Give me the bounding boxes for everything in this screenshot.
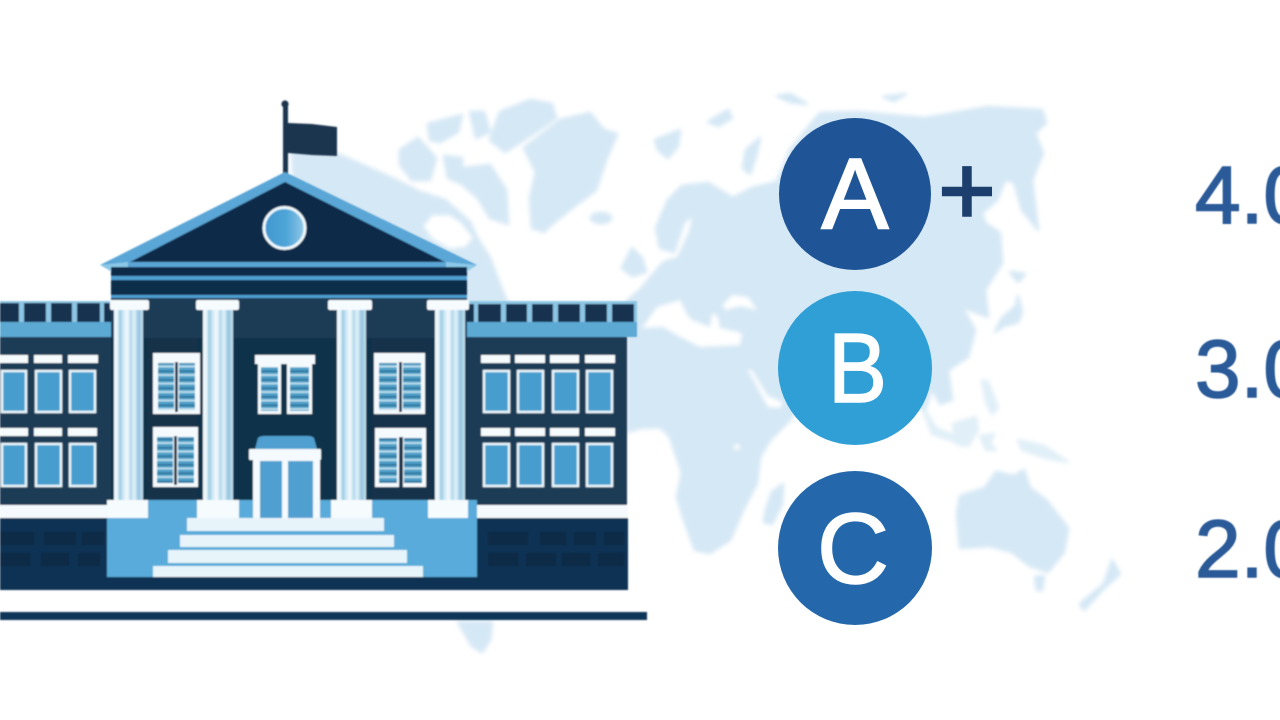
column 2 (196, 300, 239, 518)
map: UK (622, 248, 646, 276)
map: Tasmania and New Zealand (1035, 560, 1120, 610)
map: Southeast Asia (920, 380, 1068, 462)
grade badge B: B (828, 313, 887, 423)
map: Iceland (591, 213, 611, 223)
map: Greenland (524, 113, 617, 232)
map: Japan (995, 272, 1025, 332)
column 4 (427, 300, 469, 518)
map: northern islands (655, 94, 906, 174)
GPA values (1195, 150, 1280, 595)
shuttered windows (153, 353, 426, 487)
map: Arctic islands (400, 100, 556, 224)
steps (153, 518, 423, 577)
map: inland seas (642, 295, 783, 450)
column 1 (107, 300, 149, 518)
map: Black Sea (722, 295, 757, 310)
grade badge B (778, 291, 932, 445)
columns (107, 300, 469, 518)
door (249, 436, 321, 519)
grade badge C (778, 471, 932, 625)
world map (292, 94, 1120, 652)
plus sign: + (938, 135, 996, 245)
pediment roundel (264, 208, 305, 248)
grade badge A+: A (822, 138, 889, 250)
map: Red Sea (748, 369, 783, 408)
map: Afro-Eurasia (628, 107, 1046, 553)
grade badge C: C (817, 493, 889, 605)
map: Australia (957, 470, 1068, 572)
right wing windows (481, 355, 615, 486)
right wing (467, 301, 637, 505)
left wing windows (0, 355, 98, 486)
map: Lake (734, 444, 740, 450)
map: North America (292, 150, 508, 304)
grade badge A+ (779, 118, 996, 270)
left wing (0, 301, 112, 505)
map: Madagascar (764, 484, 783, 524)
building (0, 100, 647, 620)
pediment (100, 172, 477, 298)
central portico (107, 296, 477, 577)
map: South America tip (458, 622, 492, 652)
column 3 (328, 300, 372, 518)
flag (281, 100, 337, 174)
basement (0, 505, 628, 590)
map: Mediterranean (642, 300, 742, 347)
ground line (0, 612, 647, 620)
